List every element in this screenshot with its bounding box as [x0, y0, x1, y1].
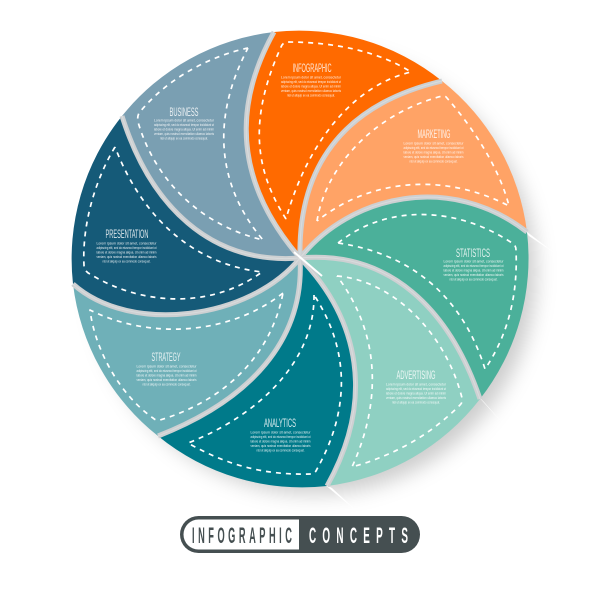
- body text: Lorem ipsum dolor sit amet, consectetur: [96, 242, 157, 246]
- body text: labore et dolore magna aliqua. Ut enim ad minim: [154, 128, 214, 132]
- body text: Lorem ipsum dolor sit amet, consectetur: [386, 382, 447, 386]
- body text: nisi ut aliquip ex ea commodo consequat.: [256, 448, 304, 452]
- body text: nisi ut aliquip ex ea commodo consequat.: [392, 400, 440, 404]
- body text: Lorem ipsum dolor sit amet, consectetur: [404, 142, 464, 146]
- drop shadow of the wheel: [92, 50, 536, 494]
- body text: adipiscing elit, sed do eiusmod tempor incididunt ut: [386, 387, 446, 391]
- body text: nisi ut aliquip ex ea commodo consequat.: [410, 160, 458, 164]
- panel: infographic segment: INFOGRAPHIC: [292, 61, 332, 75]
- body text: labore et dolore magna aliqua. Ut enim ad minim: [281, 84, 341, 88]
- body text: veniam, quis nostrud exercitation ullamco laboris: [136, 378, 197, 382]
- dashed outline: [259, 42, 411, 219]
- body text: nisi ut aliquip ex ea commodo consequat.: [450, 278, 498, 282]
- panel: strategy segment: [73, 258, 300, 436]
- panel: advertising segment: [300, 257, 480, 486]
- body text: Lorem ipsum dolor sit amet, consectetur: [444, 260, 504, 264]
- panel: analytics segment: [158, 258, 356, 487]
- panel: statistics segment: [300, 197, 529, 399]
- heading: STATISTICS: [456, 246, 490, 260]
- body text: adipiscing elit, sed do eiusmod tempor incididunt ut: [154, 123, 214, 127]
- segment fill: [73, 258, 300, 436]
- footer badge: [180, 516, 420, 553]
- body text: adipiscing elit, sed do eiusmod tempor incididunt ut: [136, 369, 196, 373]
- body text: [281, 76, 342, 98]
- grey dividers between segments: [73, 32, 527, 486]
- body text: labore et dolore magna aliqua. Ut enim ad minim: [136, 374, 196, 378]
- body text: [136, 364, 197, 386]
- segment fill: [122, 32, 300, 259]
- body text: veniam, quis nostrud exercitation ullamco laboris: [154, 132, 214, 136]
- segment fill: [300, 257, 480, 486]
- dashed outline: [138, 48, 263, 240]
- body text: veniam, quis nostrud exercitation ullamco laboris: [386, 396, 446, 400]
- panel: business segment: [122, 32, 300, 259]
- panel: business segment: BUSINESS: [170, 105, 198, 119]
- segment fill: [246, 31, 442, 258]
- body text: labore et dolore magna aliqua. Ut enim ad minim: [250, 440, 310, 444]
- body text: adipiscing elit, sed do eiusmod tempor incididunt ut: [444, 264, 504, 268]
- panel: infographic segment: [246, 31, 442, 258]
- body text: labore et dolore magna aliqua. Ut enim ad minim: [96, 250, 156, 254]
- panel: marketing segment: [300, 81, 527, 258]
- panel: strategy segment: STRATEGY: [152, 350, 180, 364]
- body text: Lorem ipsum dolor sit amet, consectetur: [250, 430, 311, 434]
- body text: [154, 118, 215, 140]
- body text: labore et dolore magna aliqua. Ut enim ad minim: [404, 150, 464, 154]
- body text: [444, 260, 504, 282]
- segment fill: [300, 197, 529, 399]
- dashed outline: [317, 96, 509, 221]
- panel: marketing segment: MARKETING: [418, 127, 450, 141]
- body text: veniam, quis nostrud exercitation ullamco laboris: [250, 444, 311, 448]
- body text: labore et dolore magna aliqua. Ut enim ad minim: [386, 392, 446, 396]
- body text: labore et dolore magna aliqua. Ut enim ad minim: [444, 268, 504, 272]
- panel: presentation segment: PRESENTATION: [106, 227, 148, 241]
- body text: adipiscing elit, sed do eiusmod tempor incididunt ut: [250, 435, 310, 439]
- body text: veniam, quis nostrud exercitation ullamco laboris: [281, 89, 341, 93]
- panel: analytics segment: ANALYTICS: [264, 416, 296, 430]
- body text: nisi ut aliquip ex ea commodo consequat.: [160, 136, 208, 140]
- panel: presentation segment: [72, 116, 300, 315]
- dashed outline: [84, 147, 262, 299]
- white streaks in the shadow: [324, 228, 556, 514]
- body text: [386, 382, 447, 404]
- panel: advertising segment: ADVERTISING: [396, 368, 436, 382]
- body text: nisi ut aliquip ex ea commodo consequat.: [142, 382, 190, 386]
- dashed outline: [90, 293, 283, 420]
- dashed outline: [338, 214, 516, 369]
- body text: Lorem ipsum dolor sit amet, consectetur: [136, 364, 197, 368]
- segment fill: [158, 258, 356, 487]
- body text: adipiscing elit, sed do eiusmod tempor incididunt ut: [96, 246, 156, 250]
- segment fill: [300, 81, 527, 258]
- badge background: [180, 516, 420, 553]
- body text: adipiscing elit, sed do eiusmod tempor incididunt ut: [404, 146, 464, 150]
- body text: nisi ut aliquip ex ea commodo consequat.: [287, 94, 335, 98]
- badge white half: [184, 520, 299, 550]
- body text: Lorem ipsum dolor sit amet, consectetur: [281, 76, 342, 80]
- body text: veniam, quis nostrud exercitation ullamco laboris: [444, 273, 504, 277]
- body text: [96, 242, 157, 264]
- body text: [250, 430, 311, 452]
- badge left label: INFOGRAPHIC: [192, 523, 292, 548]
- dashed outline: [337, 276, 462, 467]
- badge right label: CONCEPTS: [309, 524, 408, 548]
- body text: nisi ut aliquip ex ea commodo consequat.: [102, 260, 150, 264]
- dashed outline: [188, 295, 341, 474]
- body text: veniam, quis nostrud exercitation ullamco laboris: [96, 255, 157, 259]
- body text: Lorem ipsum dolor sit amet, consectetur: [154, 118, 215, 122]
- segment fill: [72, 116, 300, 315]
- white centre highlight: [294, 252, 322, 276]
- body text: [404, 142, 464, 164]
- body text: adipiscing elit, sed do eiusmod tempor incididunt ut: [281, 80, 341, 84]
- body text: veniam, quis nostrud exercitation ullamco laboris: [404, 155, 464, 159]
